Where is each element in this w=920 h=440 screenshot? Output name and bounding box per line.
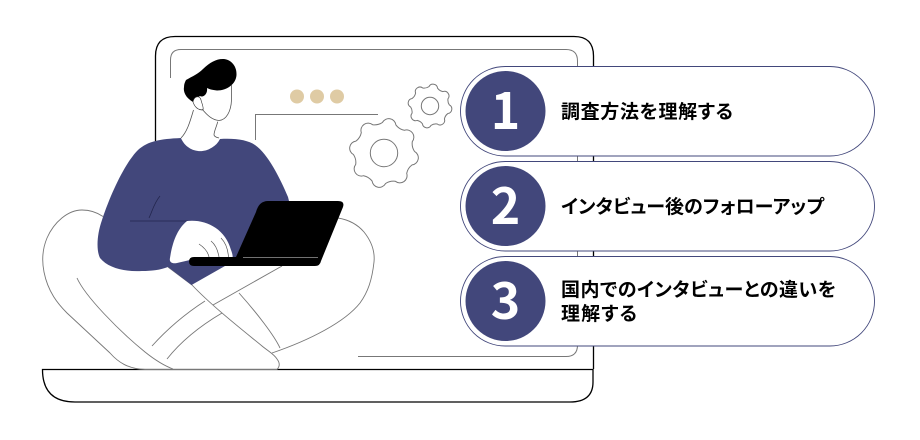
label: インタビュー後のフォローアップ xyxy=(561,192,825,219)
label: 理解する xyxy=(561,299,637,326)
number: 1 xyxy=(491,72,520,144)
pill outline xyxy=(460,162,874,251)
icon: large gear xyxy=(350,119,418,187)
legs xyxy=(43,210,374,370)
label xyxy=(561,275,836,326)
illustration: laptop base xyxy=(42,370,593,402)
icon: three dots xyxy=(290,90,344,104)
sleeve lines xyxy=(130,196,188,221)
number: 2 xyxy=(491,167,520,239)
item 1 xyxy=(460,66,874,156)
number badge xyxy=(466,261,546,341)
number: 3 xyxy=(491,262,520,334)
hand xyxy=(170,221,233,263)
illustration: seated person xyxy=(43,59,374,370)
ear xyxy=(193,97,203,110)
icon: small gear xyxy=(408,84,452,128)
small laptop xyxy=(189,201,343,266)
pill outline xyxy=(460,66,874,156)
item 2 xyxy=(460,162,874,251)
illustration: monitor frame xyxy=(156,36,594,369)
jaw line xyxy=(202,85,232,120)
neck and face xyxy=(181,85,232,151)
label: 調査方法を理解する xyxy=(561,97,733,124)
item 3 xyxy=(460,256,874,346)
sweater xyxy=(98,138,290,285)
number badge xyxy=(466,166,546,246)
connector line xyxy=(256,114,378,140)
pill outline xyxy=(460,256,874,346)
hair xyxy=(184,59,237,102)
number badge xyxy=(466,71,546,151)
label: 国内でのインタビューとの違いを xyxy=(561,275,836,302)
